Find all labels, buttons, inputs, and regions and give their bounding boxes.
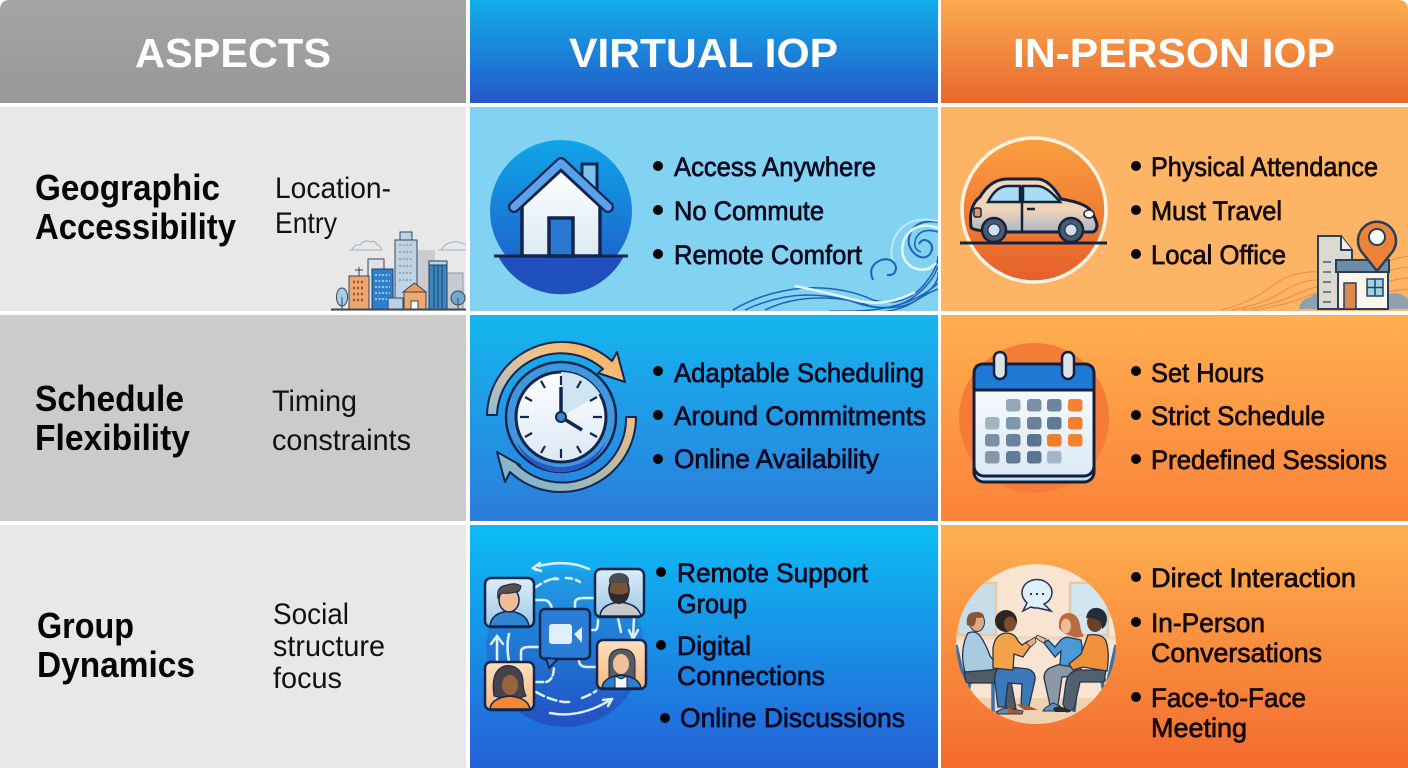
list: virtual group: Connections bbox=[677, 661, 825, 691]
icon: car bbox=[960, 138, 1107, 282]
list: virtual access bbox=[653, 152, 876, 270]
person 2 bbox=[995, 666, 1035, 707]
aspect note: location entry bbox=[275, 172, 391, 240]
panel: schedule flexibility aspect bbox=[0, 315, 466, 521]
header: in-person IOP bbox=[941, 0, 1408, 103]
icon: calendar bbox=[959, 343, 1109, 493]
icon: clock with circular arrows bbox=[487, 342, 636, 492]
list: virtual schedule bbox=[653, 358, 926, 474]
list: virtual schedule: Adaptable Scheduling bbox=[674, 358, 924, 388]
list: virtual access: Access Anywhere bbox=[674, 152, 876, 182]
list: in-person group bbox=[1131, 563, 1356, 743]
aspect heading: geographic accessibility: Geographic bbox=[35, 167, 220, 208]
aspect note: timing constraints bbox=[272, 385, 411, 457]
aspect note: timing constraints: constraints bbox=[272, 424, 411, 457]
aspect note: social structure focus bbox=[273, 598, 385, 695]
list: in-person access: Must Travel bbox=[1151, 196, 1282, 226]
icon: house bbox=[490, 140, 632, 294]
panel: group dynamics aspect bbox=[0, 525, 466, 768]
aspect heading: schedule flexibility bbox=[35, 378, 190, 458]
decoration: orange contour lines bbox=[1222, 256, 1408, 310]
list: virtual group: Online Discussions bbox=[680, 703, 905, 733]
list: in-person schedule: Strict Schedule bbox=[1151, 401, 1325, 431]
panel: in-person group dynamics bbox=[941, 525, 1408, 768]
list: in-person schedule: Predefined Sessions bbox=[1151, 445, 1387, 475]
icon: local office with map pin bbox=[1299, 222, 1408, 309]
list: virtual group: Digital bbox=[677, 631, 751, 661]
list: in-person group: Direct Interaction bbox=[1151, 563, 1356, 593]
aspect heading: group dynamics: Group bbox=[37, 605, 134, 646]
list: virtual schedule: Around Commitments bbox=[674, 401, 926, 431]
aspect note: social structure focus: focus bbox=[273, 662, 342, 695]
header: virtual IOP: VIRTUAL IOP bbox=[569, 30, 838, 76]
list: virtual group: Group bbox=[677, 589, 747, 619]
header: in-person IOP: IN-PERSON IOP bbox=[1013, 30, 1335, 76]
panel: virtual group dynamics bbox=[470, 525, 938, 768]
list: in-person group: In-Person bbox=[1151, 608, 1265, 638]
person 1 bbox=[964, 669, 1016, 709]
list: virtual schedule: Online Availability bbox=[674, 444, 879, 474]
icon: online video group bbox=[485, 563, 646, 727]
header: aspects bbox=[0, 0, 466, 103]
panel: in-person geographic accessibility bbox=[941, 107, 1408, 311]
aspect heading: schedule flexibility: Flexibility bbox=[35, 417, 190, 458]
list: in-person group: Face-to-Face bbox=[1151, 683, 1306, 713]
header: virtual IOP bbox=[470, 0, 938, 103]
list: virtual group: Remote Support bbox=[677, 558, 868, 588]
aspect note: social structure focus: structure bbox=[273, 630, 385, 663]
header: aspects: ASPECTS bbox=[135, 30, 331, 76]
list: in-person access: Local Office bbox=[1151, 240, 1286, 270]
list: virtual group bbox=[656, 558, 905, 733]
decoration: blue waves bbox=[733, 220, 938, 312]
chairs bbox=[956, 645, 1116, 712]
aspect heading: schedule flexibility: Schedule bbox=[35, 378, 184, 419]
speech bubble bbox=[1022, 580, 1052, 611]
list: in-person access: Physical Attendance bbox=[1151, 152, 1378, 182]
list: virtual access: No Commute bbox=[674, 196, 824, 226]
list: in-person schedule bbox=[1131, 358, 1387, 475]
aspect note: social structure focus: Social bbox=[273, 598, 349, 631]
panel: virtual geographic accessibility bbox=[470, 107, 938, 312]
panel: geographic accessibility aspect bbox=[0, 107, 466, 311]
aspect note: location entry: Entry bbox=[275, 207, 337, 240]
list: in-person group: Conversations bbox=[1151, 638, 1322, 668]
icon: city skyline bbox=[331, 232, 466, 310]
person 3 bbox=[1044, 662, 1081, 705]
aspect heading: group dynamics bbox=[37, 605, 195, 685]
aspect heading: geographic accessibility: Accessibility bbox=[35, 206, 236, 247]
list: in-person group: Meeting bbox=[1151, 713, 1247, 743]
panel: in-person schedule flexibility bbox=[941, 315, 1408, 521]
panel: virtual schedule flexibility bbox=[470, 315, 938, 521]
aspect heading: geographic accessibility bbox=[35, 167, 236, 247]
aspect note: timing constraints: Timing bbox=[272, 385, 357, 418]
list: in-person access bbox=[1131, 152, 1378, 270]
list: virtual access: Remote Comfort bbox=[674, 240, 862, 270]
aspect note: location entry: Location- bbox=[275, 172, 391, 205]
aspect heading: group dynamics: Dynamics bbox=[37, 644, 195, 685]
person 4 bbox=[1063, 670, 1106, 712]
list: in-person schedule: Set Hours bbox=[1151, 358, 1264, 388]
icon: people talking in a circle bbox=[956, 564, 1116, 728]
